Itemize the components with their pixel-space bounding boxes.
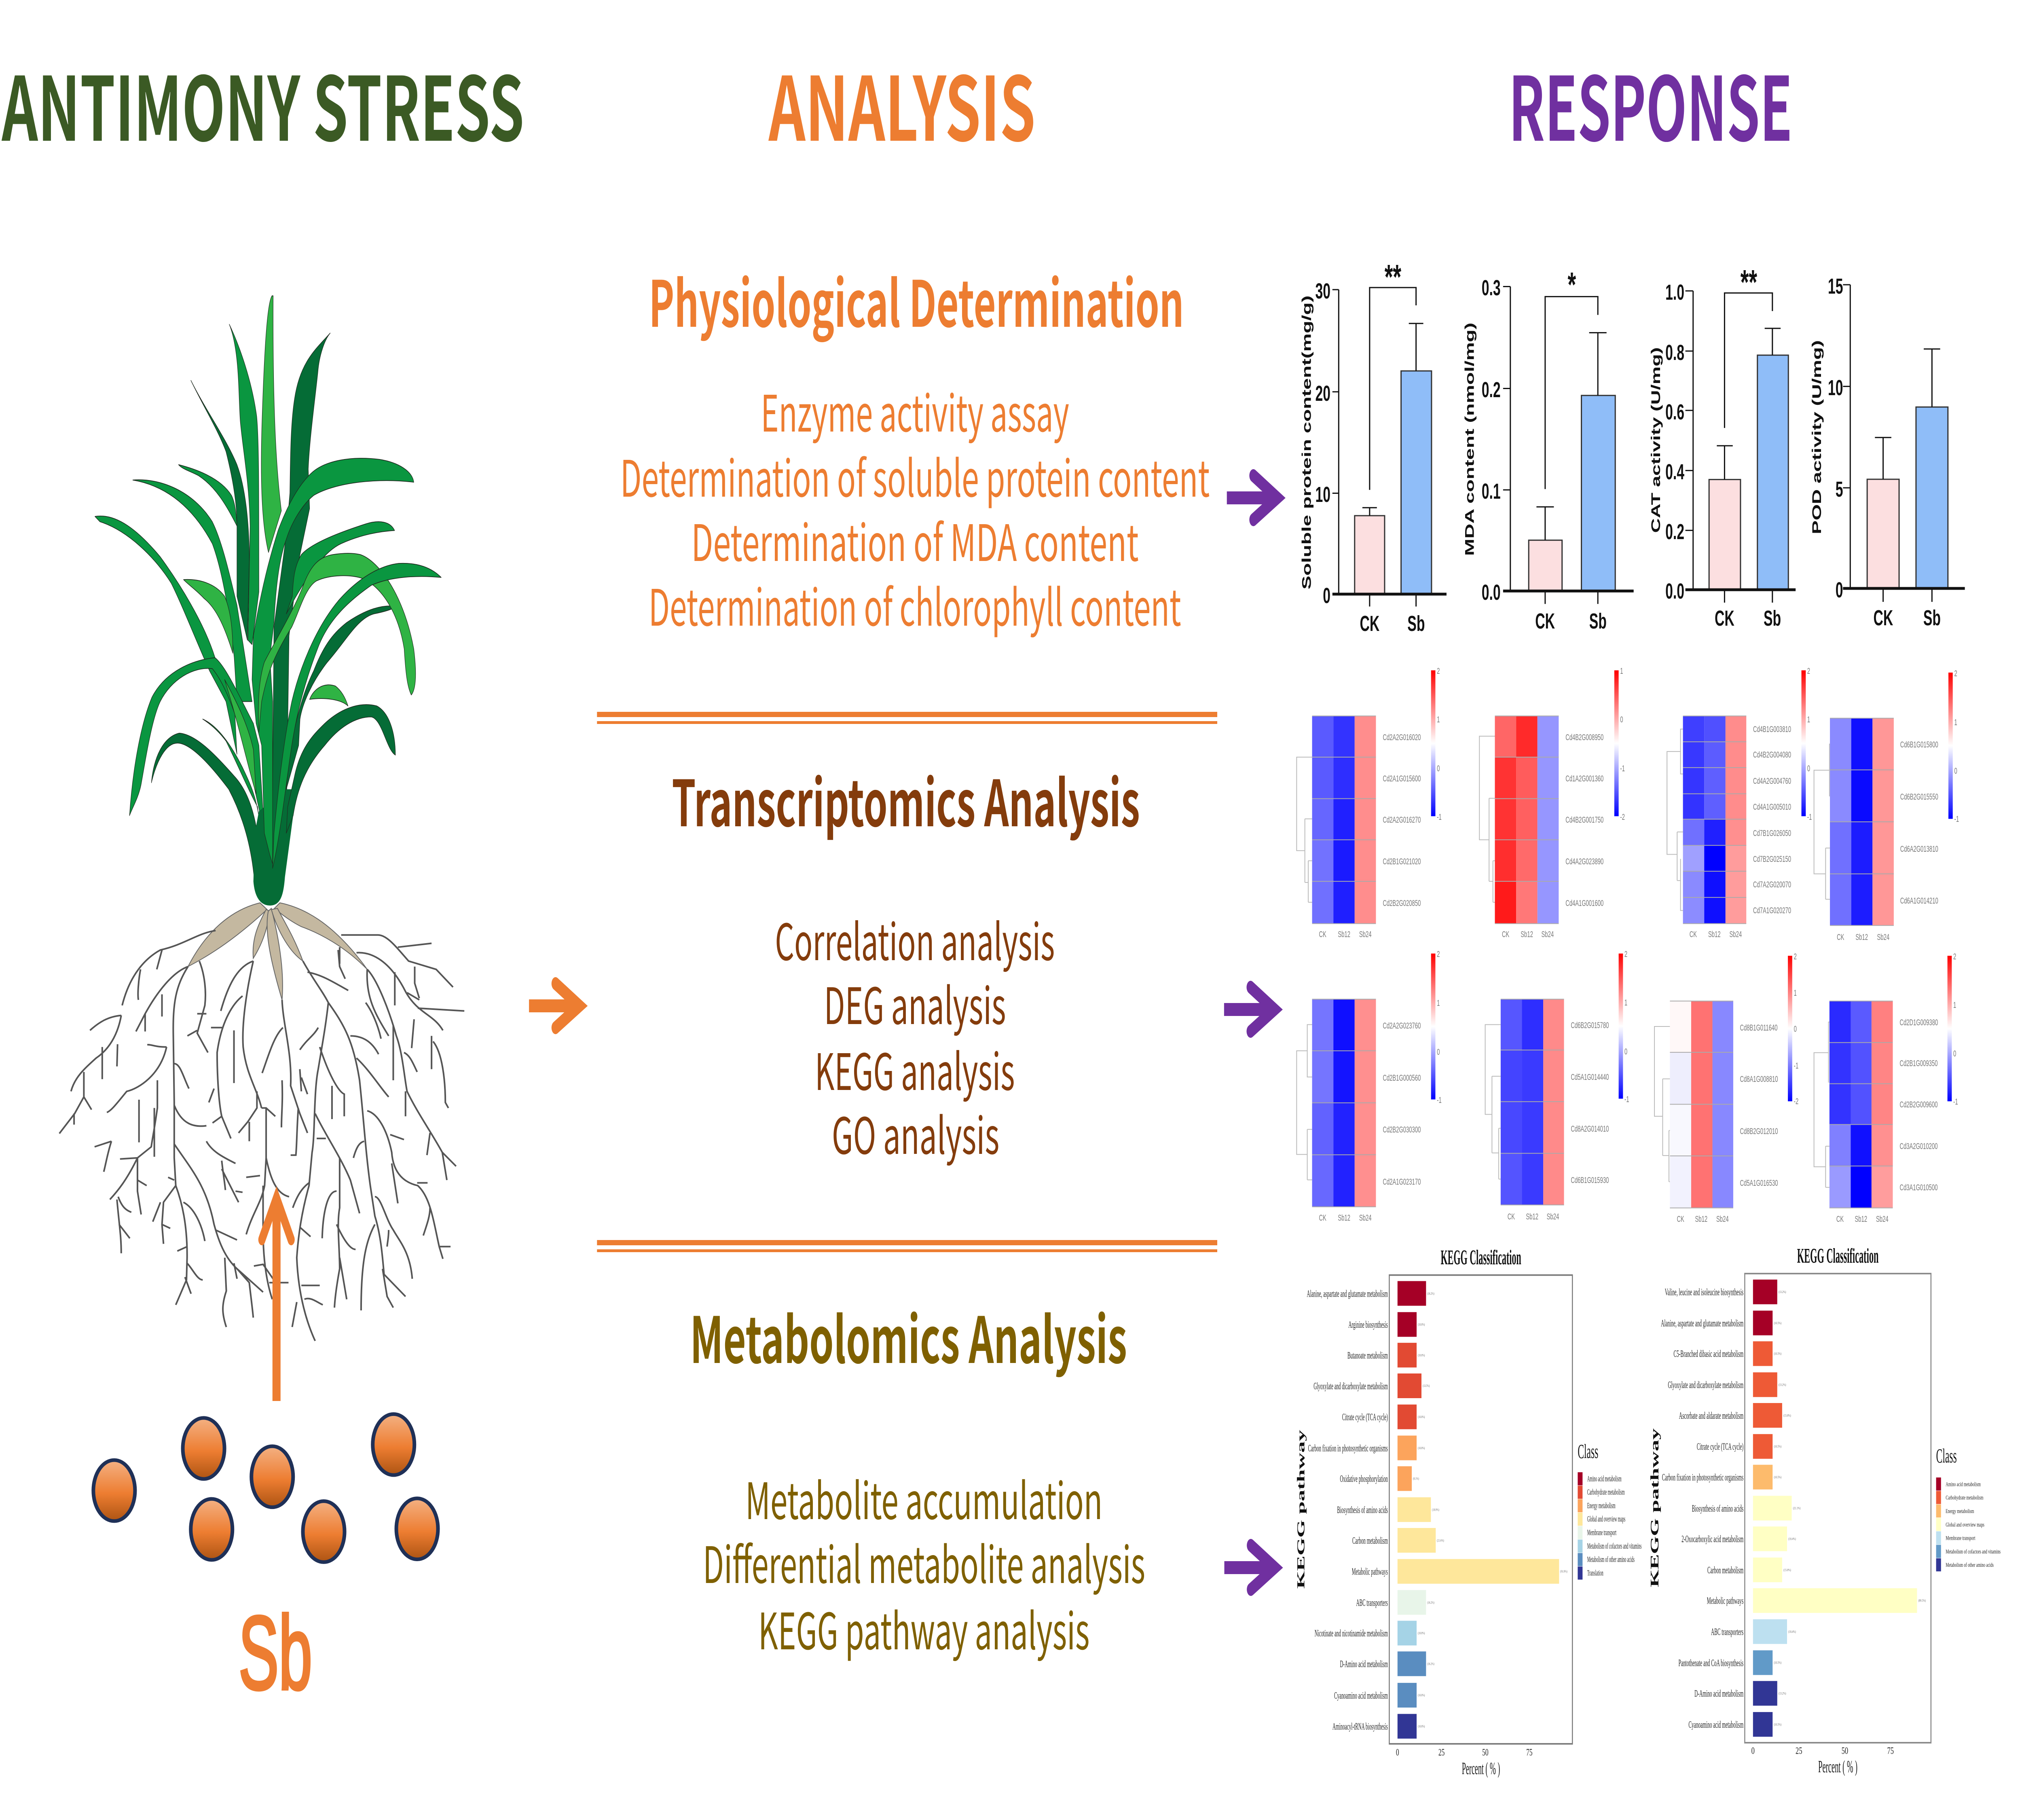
chart: KEGG classification left: (10.8%) — [1418, 1446, 1425, 1450]
heatmap: group 3: 1 — [1807, 715, 1810, 724]
heatmap: group 3: Sb24 — [1730, 929, 1742, 939]
chart: KEGG classification left: (10.8%) — [1418, 1323, 1425, 1327]
chart: KEGG classification left: Energy metabolism — [1587, 1501, 1616, 1510]
heatmap: group 3: -1 — [1807, 812, 1812, 822]
chart: KEGG classification right: (10.5%) — [1774, 1475, 1782, 1479]
chart: KEGG classification right: (21.1%) — [1793, 1507, 1801, 1510]
chart: MDA content: Sb — [1589, 609, 1607, 633]
chart: KEGG classification right: (10.5%) — [1774, 1352, 1782, 1356]
chart: KEGG classification left: Amino acid metabolism — [1587, 1474, 1622, 1483]
heatmap: group 6: Sb12 — [1526, 1212, 1538, 1221]
chart: KEGG classification left: Glyoxylate and dicarboxylate metabolism — [1313, 1381, 1388, 1392]
chart: KEGG classification right: C5-Branched dibasic acid metabolism — [1673, 1349, 1743, 1359]
heatmap: group 1: 0 — [1437, 764, 1440, 773]
chart: KEGG classification left: Carbon metabolism — [1352, 1536, 1388, 1546]
chart: KEGG classification right: 50 — [1842, 1746, 1848, 1756]
heatmap: group 6: 2 — [1624, 949, 1627, 959]
heatmap: group 4: -1 — [1954, 814, 1959, 824]
heatmap: group 5: 2 — [1437, 949, 1440, 959]
heatmap: group 7: Cd8A1G008810 — [1740, 1074, 1778, 1084]
chart: KEGG classification right: Carbon metabolism — [1707, 1565, 1743, 1576]
chart: KEGG classification left: (10.8%) — [1418, 1353, 1425, 1357]
heatmap: group 7: Cd8B1G011640 — [1740, 1023, 1778, 1033]
chart: CAT activity: CK — [1715, 606, 1734, 631]
chart: KEGG classification right: KEGG Classification — [1797, 1244, 1879, 1268]
chart: soluble protein content: Soluble protein content(mg/g) — [1299, 295, 1313, 590]
heading: metabolomics analysis: Metabolomics Analysis — [690, 1289, 1127, 1382]
heatmap: group 1: Cd2A1G015600 — [1383, 774, 1421, 783]
chart: MDA content — [1462, 266, 1634, 633]
heatmap: group 2: Cd4B2G001750 — [1565, 815, 1604, 825]
chart: CAT activity: 1.0 — [1665, 280, 1684, 305]
heatmap: group 4: Cd6B2G015550 — [1900, 792, 1938, 802]
chart: KEGG classification left: Translation — [1587, 1568, 1603, 1577]
chart: KEGG classification right: Global and overview maps — [1946, 1521, 1984, 1528]
chart: KEGG classification right: Pantothenate and CoA biosynthesis — [1679, 1658, 1743, 1668]
chart: soluble protein content: CK — [1360, 611, 1380, 636]
chart: CAT activity: 0.0 — [1665, 579, 1684, 603]
chart: KEGG classification left: (10.8%) — [1418, 1632, 1425, 1635]
chart: KEGG classification left: Arginine biosynthesis — [1348, 1320, 1388, 1330]
heatmap: group 2: CK — [1502, 929, 1509, 939]
heatmap: group 8: 1 — [1953, 1000, 1956, 1010]
heatmap: group 1: 1 — [1437, 715, 1440, 724]
heatmap: group 1: Cd2B2G020850 — [1383, 898, 1421, 908]
text block: metabolomics methods — [703, 1461, 1145, 1664]
heatmap: group 4: 1 — [1954, 717, 1957, 727]
illustration: plant roots — [59, 903, 464, 1341]
chart: MDA content: 0.3 — [1482, 275, 1501, 300]
text block: transcriptomics methods: Correlation analysis — [775, 902, 1055, 975]
heatmap: group 4 — [1814, 669, 1959, 942]
chart: KEGG classification right: Biosynthesis of amino acids — [1692, 1503, 1743, 1514]
heatmap: group 7: Cd5A1G016530 — [1740, 1178, 1778, 1188]
illustration: grass plant leaves — [95, 296, 441, 906]
chart: CAT activity: 0.2 — [1665, 519, 1684, 544]
heatmap: group 6: CK — [1508, 1212, 1515, 1221]
heatmap: group 7: -1 — [1794, 1061, 1798, 1071]
text block: physiological methods: Determination of MDA content — [691, 503, 1139, 576]
chart: MDA content: 0.0 — [1482, 580, 1501, 605]
heatmap: group 6: Cd6B1G015930 — [1571, 1175, 1609, 1185]
chart: soluble protein content: ** — [1385, 258, 1401, 296]
heatmap: group 5: Cd2A2G023760 — [1383, 1021, 1421, 1031]
arrow: metabolomics to KEGG charts — [1225, 1545, 1275, 1589]
chart: KEGG classification right: (13.2%) — [1779, 1383, 1786, 1387]
chart: POD activity: Sb — [1923, 605, 1941, 630]
chart: KEGG classification left: Carbon fixation in photosynthetic organisms — [1308, 1443, 1388, 1454]
chart: KEGG classification right: 2-Oxocarboxylic acid metabolism — [1681, 1534, 1743, 1545]
chart: KEGG classification right: D-Amino acid metabolism — [1694, 1689, 1743, 1699]
panel: metabolomics analysis — [690, 1289, 1145, 1664]
chart: KEGG classification left: Biosynthesis of amino acids — [1337, 1505, 1388, 1515]
chart: KEGG classification right: 0 — [1751, 1746, 1755, 1756]
heatmap: group 3: Cd7A1G020270 — [1753, 906, 1791, 915]
text block: transcriptomics methods: DEG analysis — [824, 966, 1006, 1039]
heatmap: group 7: CK — [1677, 1214, 1684, 1224]
chart: MDA content: MDA content (nmol/mg) — [1462, 322, 1476, 556]
chart: KEGG classification right: (10.5%) — [1774, 1661, 1782, 1665]
chart: KEGG classification right: Metabolism of other amino acids — [1946, 1562, 1994, 1568]
chart: MDA content: * — [1568, 266, 1576, 304]
heatmap: group 4: CK — [1837, 932, 1844, 942]
chart: POD activity: CK — [1874, 605, 1893, 630]
heatmap: group 1: Cd2B1G021020 — [1383, 857, 1421, 866]
title: analysis: ANALYSIS — [768, 39, 1036, 167]
chart: KEGG classification right: Valine, leucine and isoleucine biosynthesis — [1665, 1287, 1743, 1297]
heatmap: group 5: -1 — [1437, 1095, 1442, 1105]
text block: physiological methods: Determination of soluble protein content — [620, 438, 1210, 511]
chart: CAT activity: Sb — [1764, 606, 1781, 631]
chart: KEGG classification right: ABC transporters — [1711, 1627, 1743, 1637]
chart: KEGG classification right: (10.5%) — [1774, 1723, 1782, 1727]
panel: transcriptomics analysis — [672, 753, 1140, 1168]
heatmap: group 8: 2 — [1953, 952, 1956, 961]
text block: metabolomics methods: Metabolite accumulation — [745, 1461, 1102, 1534]
chart: KEGG classification left: Aminoacyl-tRNA biosynthesis — [1332, 1721, 1388, 1732]
chart: KEGG classification left: 0 — [1396, 1747, 1399, 1758]
chart: CAT activity — [1649, 263, 1796, 631]
arrow: stress to analysis — [529, 984, 580, 1028]
chart: KEGG classification left: ABC transporters — [1356, 1598, 1388, 1608]
chart: soluble protein content: 0 — [1323, 583, 1330, 608]
chart: POD activity: 10 — [1828, 375, 1843, 400]
heatmap: group 7: Cd8B2G012010 — [1740, 1126, 1778, 1136]
heatmap: group 5: Cd2B2G030300 — [1383, 1125, 1421, 1134]
chart: KEGG classification left: Metabolic pathways — [1352, 1566, 1388, 1577]
chart: KEGG classification right: Carbon fixation in photosynthetic organisms — [1662, 1473, 1743, 1483]
chart: KEGG classification left: Oxidative phosphorylation — [1340, 1474, 1388, 1484]
arrow: physiology to bar charts — [1227, 476, 1277, 520]
chart: KEGG classification left: Metabolism of cofactors and vitamins — [1587, 1541, 1641, 1551]
text block: transcriptomics methods: GO analysis — [832, 1096, 999, 1168]
chart: KEGG classification left: (16.2%) — [1427, 1601, 1434, 1604]
chart: KEGG classification right: Carbohydrate metabolism — [1946, 1494, 1983, 1501]
heatmap: group 6: 1 — [1624, 998, 1627, 1007]
chart: soluble protein content: 10 — [1315, 482, 1330, 507]
text block: physiological methods — [620, 373, 1210, 640]
heatmap: group 3: Cd4A2G004760 — [1753, 776, 1791, 786]
heatmap: group 2: -1 — [1620, 764, 1625, 773]
heatmap: group 8: Cd2B1G009350 — [1900, 1058, 1938, 1068]
chart: KEGG classification right: (15.8%) — [1783, 1414, 1791, 1418]
heatmap: group 8: 0 — [1953, 1049, 1956, 1058]
heatmap: group 3: Cd4B2G004080 — [1753, 750, 1791, 760]
heatmap: group 3 — [1667, 666, 1812, 939]
heatmap: group 3: Cd4A1G005010 — [1753, 802, 1791, 812]
heatmap: group 7: -2 — [1794, 1096, 1798, 1106]
chart: KEGG classification right: KEGG pathway — [1648, 1428, 1661, 1587]
chart: KEGG classification right: Ascorbate and aldarate metabolism — [1679, 1411, 1743, 1421]
heatmap: group 2: -2 — [1620, 812, 1625, 822]
chart: KEGG classification right: (15.8%) — [1783, 1568, 1791, 1572]
heatmap: group 8: Sb24 — [1876, 1214, 1889, 1224]
title: response: RESPONSE — [1509, 39, 1792, 167]
chart: CAT activity: 0.6 — [1665, 400, 1684, 424]
heatmap: group 1: 2 — [1437, 666, 1440, 676]
heatmap: group 8: Cd3A1G010500 — [1900, 1183, 1938, 1192]
heatmap: group 2: Cd4A1G001600 — [1565, 898, 1604, 908]
chart: KEGG classification left: Butanoate metabolism — [1347, 1350, 1388, 1361]
heatmap: group 3: Cd4B1G003810 — [1753, 724, 1791, 734]
chart: KEGG classification left: Metabolism of other amino acids — [1587, 1555, 1635, 1564]
chart: POD activity: 0 — [1836, 578, 1843, 602]
chart: KEGG classification left: (10.8%) — [1418, 1725, 1425, 1728]
chart: POD activity: 15 — [1828, 274, 1843, 298]
heatmap: group 6: 0 — [1624, 1047, 1627, 1056]
heatmap: group 1: Sb24 — [1359, 929, 1372, 939]
chart: KEGG classification left: 50 — [1482, 1747, 1489, 1758]
heatmap: group 2: 0 — [1620, 715, 1623, 724]
chart: KEGG classification right: (10.5%) — [1774, 1321, 1782, 1325]
heatmap: group 2: Cd4A2G023890 — [1565, 857, 1604, 866]
chart: KEGG classification right: (13.2%) — [1779, 1692, 1786, 1695]
chart: KEGG classification left: KEGG Classification — [1441, 1246, 1521, 1269]
chart: soluble protein content: Sb — [1407, 611, 1425, 636]
heatmap: group 5: 1 — [1437, 998, 1440, 1008]
chart: KEGG classification right: Class — [1936, 1445, 1957, 1467]
heatmap: group 5: Cd2A1G023170 — [1383, 1177, 1421, 1187]
chart: KEGG classification left: (8.1%) — [1413, 1477, 1419, 1481]
chart: KEGG classification left: KEGG pathway — [1295, 1430, 1307, 1589]
heatmap: group 3: 0 — [1807, 764, 1810, 773]
chart: MDA content: CK — [1535, 609, 1555, 633]
heatmap: group 8: -1 — [1953, 1097, 1958, 1107]
chart: KEGG classification left: Membrane transport — [1587, 1528, 1616, 1537]
chart: KEGG classification left: (16.2%) — [1427, 1662, 1434, 1666]
heatmap: group 4: Sb12 — [1855, 932, 1868, 942]
heatmap: group 7: 2 — [1794, 952, 1797, 961]
heatmap: group 2: 1 — [1620, 666, 1623, 676]
chart: soluble protein content: 30 — [1315, 279, 1330, 303]
arrow: uptake into root — [262, 1198, 291, 1401]
heatmap: group 8: CK — [1836, 1214, 1844, 1224]
chart: POD activity: 5 — [1836, 477, 1843, 502]
heatmap: group 1: Cd2A2G016020 — [1383, 732, 1421, 742]
heatmap: group 8 — [1814, 952, 1958, 1224]
text block: transcriptomics methods: KEGG analysis — [815, 1032, 1015, 1105]
chart: KEGG classification left: (91.9%) — [1560, 1570, 1567, 1573]
heatmap: group 6: Cd5A1G014440 — [1571, 1072, 1609, 1082]
chart: KEGG classification left: (16.2%) — [1427, 1292, 1434, 1295]
heatmap: group 5: CK — [1319, 1213, 1326, 1223]
heatmap: group 4: 2 — [1954, 669, 1957, 678]
chart: KEGG classification left: Class — [1578, 1441, 1598, 1463]
heatmap: group 6: Cd8A2G014010 — [1571, 1124, 1609, 1134]
chart: CAT activity: CAT activity (U/mg) — [1649, 347, 1663, 533]
heatmap: group 5: 0 — [1437, 1047, 1440, 1057]
text block: physiological methods: Determination of chlorophyll content — [649, 567, 1181, 640]
chart: KEGG classification left: (10.8%) — [1418, 1693, 1425, 1697]
chart: POD activity: POD activity (U/mg) — [1810, 340, 1824, 534]
chart: KEGG classification right: Metabolism of cofactors and vitamins — [1946, 1548, 2001, 1555]
chart: KEGG classification left: 75 — [1526, 1747, 1533, 1758]
chart: KEGG classification right: Energy metabolism — [1946, 1508, 1974, 1514]
heatmap: group 5 — [1297, 949, 1442, 1223]
chart: KEGG classification right: (10.5%) — [1774, 1445, 1782, 1448]
chart: MDA content: 0.2 — [1482, 377, 1501, 402]
text block: physiological methods: Enzyme activity assay — [761, 373, 1069, 446]
chart: POD activity — [1810, 274, 1965, 630]
chart: KEGG classification right: Citrate cycle (TCA cycle) — [1697, 1442, 1743, 1452]
chart: KEGG classification left: Cyanoamino acid metabolism — [1334, 1691, 1388, 1701]
title: antimony stress: ANTIMONY STRESS — [2, 39, 524, 167]
chart: KEGG classification right: Metabolic pathways — [1707, 1596, 1743, 1606]
heatmap: group 2: Cd4B2G008950 — [1565, 732, 1604, 742]
chart: KEGG classification right: (13.2%) — [1779, 1290, 1786, 1294]
chart: KEGG classification left: Alanine, aspartate and glutamate metabolism — [1307, 1289, 1388, 1299]
heatmap: group 1: Cd2A2G016270 — [1383, 815, 1421, 825]
heatmap: group 2: Sb24 — [1542, 929, 1554, 939]
chart: KEGG classification right: Cyanoamino acid metabolism — [1688, 1720, 1743, 1730]
heatmap: group 6: Sb24 — [1547, 1212, 1559, 1221]
chart: KEGG classification right: (18.4%) — [1788, 1537, 1796, 1541]
heatmap: group 8: Cd2B2G009600 — [1900, 1100, 1938, 1109]
heatmap: group 1: -1 — [1437, 812, 1442, 822]
heading: physiological determination: Physiological Determination — [649, 253, 1184, 345]
heatmap: group 4: Cd6A2G013810 — [1900, 844, 1938, 854]
text block: metabolomics methods: Differential metabolite analysis — [703, 1525, 1145, 1598]
icon: antimony particles — [93, 1414, 438, 1562]
chart: KEGG classification right — [1648, 1244, 2001, 1776]
chart: MDA content: 0.1 — [1482, 479, 1501, 504]
chart: KEGG classification left: Citrate cycle (TCA cycle) — [1342, 1412, 1388, 1423]
heatmap: group 5: Sb24 — [1359, 1213, 1372, 1223]
heatmap: group 7: 0 — [1794, 1024, 1797, 1034]
heatmap: group 5: Sb12 — [1338, 1213, 1350, 1223]
chart: KEGG classification left: Percent ( % ) — [1462, 1759, 1500, 1778]
chart: KEGG classification right: Amino acid metabolism — [1946, 1481, 1981, 1488]
chart: KEGG classification left: (21.6%) — [1437, 1539, 1444, 1543]
chart: KEGG classification right: Glyoxylate and dicarboxylate metabolism — [1668, 1380, 1743, 1390]
chart: KEGG classification right: 25 — [1796, 1746, 1802, 1756]
chart: KEGG classification left: 25 — [1438, 1747, 1445, 1758]
heatmap: group 3: 2 — [1807, 666, 1810, 676]
heatmap: group 3: Cd7A2G020070 — [1753, 880, 1791, 889]
chart: soluble protein content: 20 — [1315, 381, 1330, 406]
text block: metabolomics methods: KEGG pathway analysis — [758, 1591, 1089, 1664]
heatmap: group 7: Sb24 — [1716, 1214, 1729, 1224]
heatmap: group 3: Cd7B1G026050 — [1753, 828, 1791, 838]
heatmap: group 1: CK — [1319, 929, 1326, 939]
heatmap: group 1: Sb12 — [1338, 929, 1350, 939]
chart: KEGG classification left — [1295, 1246, 1641, 1778]
heatmap: group 7: 1 — [1794, 988, 1797, 998]
heatmap: group 2: Cd1A2G001360 — [1565, 774, 1604, 783]
heatmap: group 5: Cd2B1G000560 — [1383, 1073, 1421, 1083]
chart: KEGG classification right: (18.4%) — [1788, 1630, 1796, 1634]
heatmap: group 3: Sb12 — [1708, 929, 1721, 939]
chart: KEGG classification left: Nicotinate and nicotinamide metabolism — [1315, 1628, 1388, 1639]
heatmap: group 8: Cd3A2G010200 — [1900, 1141, 1938, 1151]
heatmap: group 2 — [1479, 666, 1625, 939]
panel: physiological determination — [620, 253, 1210, 640]
chart: KEGG classification left: (13.5%) — [1423, 1384, 1430, 1388]
chart: soluble protein content — [1299, 258, 1447, 636]
chart: KEGG classification right: Percent ( % ) — [1818, 1757, 1857, 1776]
heatmap: group 4: Cd6B1G015800 — [1900, 740, 1938, 749]
heatmap: group 6: Cd6B2G015780 — [1571, 1020, 1609, 1030]
heatmap: group 3: Cd7B2G025150 — [1753, 854, 1791, 864]
heatmap: group 2: Sb12 — [1521, 929, 1533, 939]
heatmap: group 7: Sb12 — [1695, 1214, 1707, 1224]
heatmap: group 1 — [1297, 666, 1442, 939]
chart: KEGG classification right: Alanine, aspartate and glutamate metabolism — [1661, 1318, 1743, 1329]
chart: CAT activity: 0.4 — [1665, 459, 1684, 484]
chart: KEGG classification left: (10.8%) — [1418, 1415, 1425, 1419]
heatmap: group 8: Sb12 — [1855, 1214, 1867, 1224]
heatmap: group 4: Cd6A1G014210 — [1900, 896, 1938, 906]
chart: KEGG classification left: Global and overview maps — [1587, 1514, 1625, 1524]
chart: KEGG classification right: (89.5%) — [1918, 1599, 1926, 1603]
chart: KEGG classification right: 75 — [1887, 1746, 1894, 1756]
heatmap: group 6 — [1485, 949, 1629, 1221]
chart: CAT activity: 0.8 — [1665, 340, 1684, 365]
heatmap: group 4: Sb24 — [1877, 932, 1889, 942]
label: Sb: Sb — [239, 1594, 312, 1711]
heatmap: group 4: 0 — [1954, 766, 1957, 776]
heatmap: group 8: Cd2D1G009380 — [1900, 1018, 1938, 1027]
chart: KEGG classification left: (18.9%) — [1432, 1508, 1439, 1512]
chart: KEGG classification left: D-Amino acid metabolism — [1340, 1659, 1388, 1670]
chart: CAT activity: ** — [1741, 263, 1757, 302]
arrow: transcriptomics to heatmaps — [1224, 987, 1275, 1031]
text block: transcriptomics methods — [775, 902, 1055, 1168]
heatmap: group 6: -1 — [1624, 1094, 1629, 1104]
heatmap: group 7 — [1654, 952, 1798, 1224]
heading: transcriptomics analysis: Transcriptomics Analysis — [672, 753, 1140, 845]
chart: KEGG classification right: Membrane transport — [1946, 1535, 1975, 1541]
chart: KEGG classification left: Carbohydrate metabolism — [1587, 1488, 1625, 1496]
heatmap: group 3: CK — [1690, 929, 1697, 939]
